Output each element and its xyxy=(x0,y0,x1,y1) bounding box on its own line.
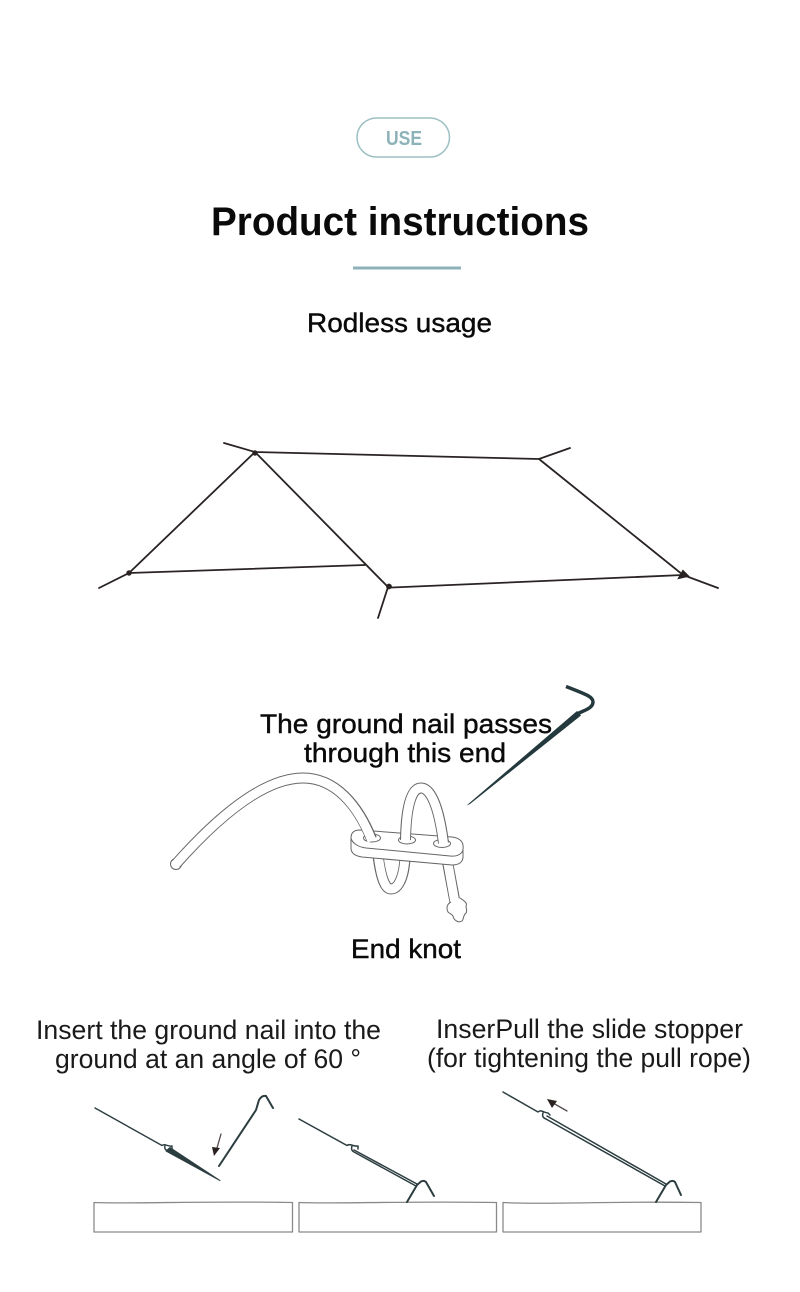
arrow 3 xyxy=(547,1099,567,1111)
rope: tail with end knot xyxy=(447,860,467,922)
label: end knot: End knot xyxy=(351,934,462,964)
falling nail 1 xyxy=(219,1096,273,1166)
ground block 3 xyxy=(503,1202,701,1232)
caption: insert the ground nail: ground at an angle of 60 ° xyxy=(55,1044,361,1074)
arrow 1 xyxy=(212,1134,221,1156)
step 3 diagram xyxy=(503,1092,701,1232)
rope: lower loop xyxy=(378,854,405,889)
diagram: rope and slide stopper xyxy=(170,778,467,922)
ground block 2 xyxy=(299,1202,496,1232)
title underline xyxy=(353,266,461,270)
step 1 diagram xyxy=(94,1096,292,1232)
icon: ground nail xyxy=(466,686,593,806)
caption: pull the slide stopper xyxy=(427,1014,751,1073)
title: Product instructions xyxy=(211,200,589,244)
diagram: rodless tarp setup xyxy=(99,443,718,618)
badge: USE xyxy=(357,118,450,157)
rope: upper loop xyxy=(406,788,444,845)
rope and stopper 1 xyxy=(95,1108,172,1151)
step 2 diagram xyxy=(299,1119,496,1232)
planted nail 2 xyxy=(407,1181,434,1202)
slide stopper body xyxy=(351,830,463,865)
planted nail 3 xyxy=(656,1181,681,1202)
caption: pull the slide stopper: (for tightening the pull rope) xyxy=(427,1043,751,1073)
ground block 1 xyxy=(94,1202,292,1232)
rope: long left section xyxy=(170,778,372,870)
label: ground nail end: through this end xyxy=(304,738,506,768)
stake 1 xyxy=(166,1148,220,1180)
caption: insert the ground nail xyxy=(36,1015,381,1074)
rope and stopper 3 xyxy=(503,1092,666,1186)
subheading: Rodless usage: Rodless usage xyxy=(307,308,492,338)
badge: USE: USE xyxy=(386,127,422,150)
label: ground nail end xyxy=(260,709,552,768)
rope and stopper 2 xyxy=(299,1119,417,1186)
caption: insert the ground nail: Insert the ground nail into the xyxy=(36,1015,381,1045)
label: ground nail end: The ground nail passes xyxy=(260,709,552,739)
caption: pull the slide stopper: InserPull the slide stopper xyxy=(436,1014,743,1044)
